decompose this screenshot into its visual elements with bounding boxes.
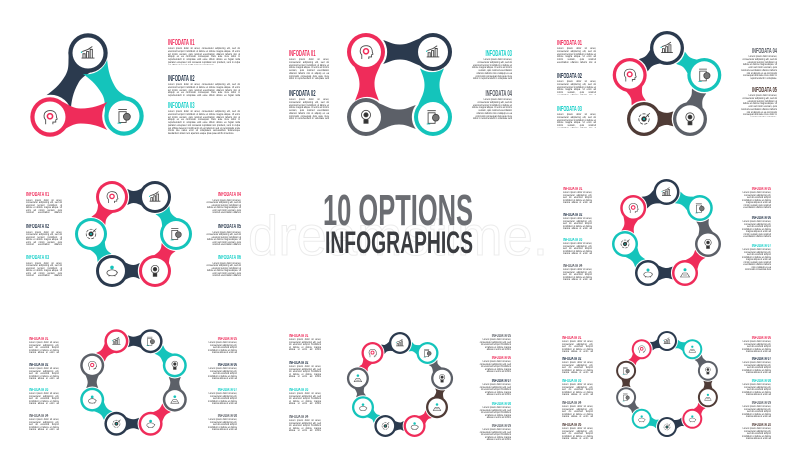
- node: head: [613, 58, 647, 92]
- link: gray: [350, 377, 369, 398]
- text block 03: INFODATA 03: [557, 106, 582, 113]
- node: target: [627, 102, 661, 136]
- node: chart: [414, 33, 452, 71]
- node: bulb: [695, 231, 721, 257]
- node: jar: [687, 195, 713, 221]
- node: jar: [616, 361, 636, 381]
- text block 09: [741, 401, 771, 417]
- link: teal: [80, 228, 115, 264]
- link: teal: [674, 337, 694, 356]
- node: target: [612, 231, 638, 257]
- node: jar: [416, 342, 438, 364]
- link: red: [144, 241, 179, 277]
- panel: 3 options: [30, 33, 240, 137]
- text block 04: [29, 414, 59, 430]
- text block 04: [562, 401, 593, 417]
- link: gray: [166, 377, 184, 400]
- link: gray: [366, 101, 416, 133]
- text block 01: [168, 39, 240, 65]
- link: red: [144, 401, 173, 430]
- node: bulb: [431, 367, 453, 389]
- text block 04: [205, 192, 241, 212]
- panel: 8 options: [29, 329, 237, 436]
- link: navy: [665, 415, 685, 434]
- text block 04: [289, 415, 321, 431]
- text block 03: [472, 50, 512, 81]
- link: navy: [649, 334, 669, 353]
- node: chart: [139, 181, 171, 213]
- text block 05: [479, 334, 511, 350]
- node: chart: [657, 331, 677, 351]
- text block 06: [479, 356, 511, 372]
- node: piggy: [682, 409, 702, 429]
- node: piggy: [635, 260, 661, 286]
- text block 03: [26, 255, 62, 276]
- link: teal: [416, 68, 448, 118]
- text block 03: [29, 388, 59, 404]
- link: red: [409, 408, 434, 432]
- node: pyramid: [347, 367, 369, 389]
- link: navy: [385, 418, 404, 434]
- link: brown: [429, 388, 448, 409]
- watermark: dreamstime.: [248, 204, 548, 267]
- text block 05: [208, 337, 237, 353]
- node: piggy: [352, 396, 374, 418]
- text block 04: INFODATA 04: [752, 48, 777, 55]
- node: jar: [414, 98, 452, 136]
- node: bulb: [673, 102, 707, 136]
- link: navy: [128, 332, 151, 350]
- node: pyramid: [426, 396, 448, 418]
- link: red: [618, 206, 643, 234]
- link: red: [94, 335, 123, 364]
- node: bulb: [139, 255, 171, 287]
- text block 03: [289, 388, 321, 404]
- text block 05: INFODATA 05: [752, 87, 777, 94]
- node: head: [80, 353, 104, 377]
- node: chart: [650, 31, 684, 65]
- text block 03: [557, 106, 596, 128]
- node: chart: [68, 33, 108, 73]
- node: jar: [616, 387, 636, 407]
- node: jar: [687, 58, 721, 92]
- text block 01: [26, 192, 62, 212]
- link: teal: [673, 188, 704, 217]
- link: red: [687, 401, 708, 423]
- link: gray: [692, 353, 714, 375]
- text block 02: [289, 361, 321, 377]
- text block 07: [479, 379, 511, 395]
- node: target: [104, 412, 128, 436]
- node: pyramid: [698, 387, 718, 407]
- link: red: [626, 345, 647, 367]
- panel: 9 options: [289, 332, 511, 440]
- panel: 7 options: [563, 179, 771, 286]
- text block 02: [26, 224, 62, 244]
- link: gray: [426, 358, 449, 382]
- text block 02: [557, 73, 596, 95]
- text block 01: [289, 50, 329, 81]
- text block 10: [741, 423, 771, 439]
- text block 02: [289, 90, 329, 119]
- link: brown: [619, 371, 633, 387]
- link: brown: [644, 107, 673, 131]
- text block 05: [562, 423, 593, 439]
- node: head: [620, 195, 646, 221]
- link: teal: [80, 58, 138, 124]
- link: navy: [112, 259, 140, 283]
- text block 02: [168, 75, 240, 97]
- node: head: [96, 181, 128, 213]
- node: jar: [160, 218, 192, 250]
- node: piggy: [139, 412, 163, 436]
- node: jar: [139, 329, 163, 353]
- node: head: [347, 33, 385, 71]
- text block 08: [741, 379, 771, 395]
- text block 07: [741, 357, 771, 373]
- node: piggy: [632, 409, 652, 429]
- node: chart: [104, 329, 128, 353]
- node: pyramid: [682, 339, 702, 359]
- text block 08: [208, 414, 237, 430]
- node: pyramid: [163, 388, 187, 412]
- text block 01: [289, 334, 321, 350]
- text block 02: INFODATA 02: [557, 73, 582, 80]
- link: navy: [127, 185, 155, 209]
- link: navy: [636, 38, 674, 75]
- node: target: [657, 417, 677, 437]
- link: teal: [407, 339, 430, 361]
- node: piggy: [404, 415, 426, 437]
- panel: 10 options: [562, 331, 771, 439]
- link: brown: [701, 381, 715, 397]
- node: chart: [654, 179, 680, 205]
- title: 10 options: 10 OPTIONS: [323, 186, 473, 235]
- node: head: [632, 339, 652, 359]
- link: red: [88, 191, 123, 227]
- text block 01: [557, 40, 596, 62]
- text block 01: INFODATA 01: [557, 40, 582, 47]
- text block 06: [208, 363, 237, 379]
- text block 06: [205, 255, 241, 276]
- panel: 4 options: [289, 33, 512, 136]
- link: red: [351, 51, 383, 101]
- text block 01: [563, 187, 592, 203]
- link: gray: [693, 218, 718, 246]
- link: red: [677, 248, 708, 279]
- panel: 5 options: [557, 31, 777, 136]
- node: piggy: [80, 388, 104, 412]
- text block 04: Lorem ipsum dolor sit amet, consectetur adipiscing elit, sed do eiusmod tempor incididunt ut labore et dolore magna aliqua. Ut enim ad minim veniam, quis nostrud exercitation ullamco laboris nisi ut aliquip ex ea commodo consequat duis aute irure dolor in reprehenderit in voluptate.: [741, 56, 777, 80]
- text block 04: [472, 90, 512, 119]
- node: target: [374, 415, 396, 437]
- node: bulb: [163, 353, 187, 377]
- text block 02: [563, 213, 592, 229]
- link: teal: [152, 343, 181, 372]
- link: teal: [673, 48, 711, 85]
- text block 07: [208, 388, 237, 404]
- link: navy: [44, 44, 102, 111]
- text block 02: [29, 363, 59, 379]
- link: teal: [617, 238, 648, 270]
- text block 08: [479, 402, 511, 418]
- node: head: [30, 97, 70, 137]
- text block 06: [741, 336, 771, 352]
- title: infographics: INFOGRAPHICS: [325, 224, 473, 260]
- text block 05: [205, 224, 241, 244]
- node: chart: [389, 332, 411, 354]
- link: teal: [86, 393, 115, 422]
- link: red: [51, 99, 107, 133]
- node: target: [75, 218, 107, 250]
- link: navy: [648, 263, 673, 283]
- node: head: [362, 342, 384, 364]
- link: teal: [152, 204, 187, 240]
- link: teal: [358, 401, 382, 425]
- node: jar: [104, 96, 144, 136]
- text block 03: [562, 379, 593, 395]
- text block 03: Lorem ipsum dolor sit amet, consectetur adipiscing elit, sed do eiusmod tempor incididunt ut labore et dolore magna aliqua. Ut enim ad minim veniam, quis nostrud exercitation ullamco laboris nisi ut aliquip ex ea commodo consequat. Duis aute irure dolor in reprehenderit in voluptate velit esse cillum dolore eu fugiat nulla pariatur excepteur sint occaecat cupidatat non proident, sunt in culpa qui officia deserunt mollit anim id est laborum sed ut perspiciatis unde omnis iste natus error sit voluptatem accusantium doloremque laudantium totam rem aperiam eaque ipsa quae ab illo inventore.: [168, 111, 240, 135]
- text block 01: [29, 337, 59, 353]
- node: piggy: [96, 255, 128, 287]
- node: bulb: [698, 361, 718, 381]
- link: red: [356, 349, 379, 373]
- link: gray: [679, 87, 711, 123]
- text block 04: [563, 264, 592, 280]
- text block 01: [562, 336, 593, 352]
- text block 09: [479, 424, 511, 440]
- link: gray: [620, 393, 642, 415]
- link: navy: [116, 415, 139, 433]
- link: navy: [383, 36, 433, 68]
- text block 03: [563, 238, 592, 254]
- link: red: [618, 71, 650, 107]
- text block 02: [562, 357, 593, 373]
- link: navy: [380, 335, 403, 357]
- node: bulb: [347, 98, 385, 136]
- panel: 6 options: [26, 181, 241, 287]
- link: teal: [640, 412, 660, 431]
- node: pyramid: [672, 260, 698, 286]
- link: navy: [640, 183, 671, 212]
- link: gray: [83, 365, 101, 388]
